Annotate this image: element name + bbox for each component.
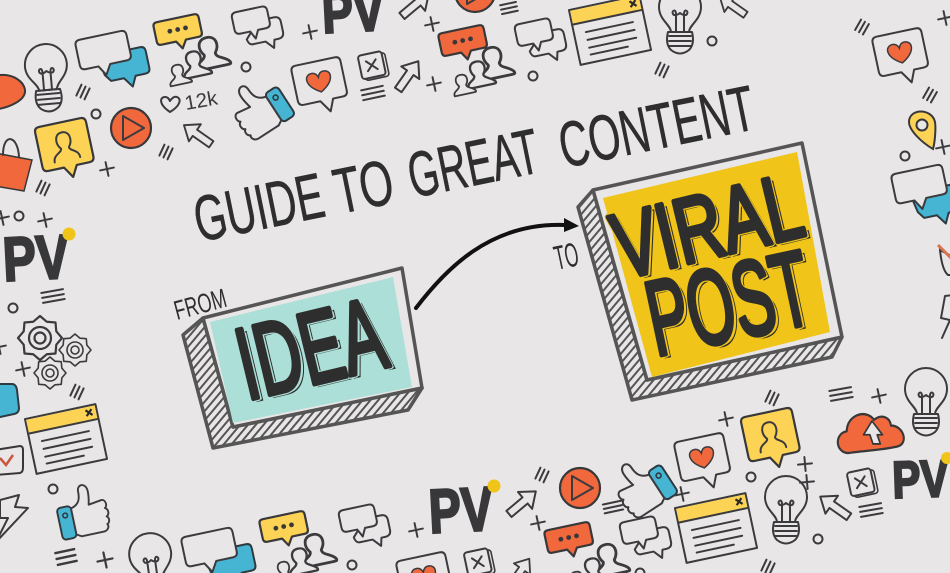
- ring: [348, 560, 356, 570]
- ring: [900, 152, 910, 160]
- plus: [426, 76, 442, 92]
- icon: map pin: [909, 112, 935, 149]
- lines: [765, 391, 779, 405]
- lines: [603, 501, 623, 513]
- lines: [41, 289, 65, 303]
- icon: play: [560, 468, 600, 508]
- icon: bulb: [23, 42, 71, 113]
- icon: orange cloud: [0, 75, 25, 110]
- icon: upload cloud: [838, 414, 904, 453]
- plus: [408, 522, 424, 538]
- lines: [923, 88, 937, 102]
- post label: [636, 228, 825, 382]
- icon: white bubble: [181, 527, 240, 573]
- plus: [37, 212, 53, 228]
- icon: thumb: [223, 70, 296, 143]
- lines: [655, 63, 669, 77]
- icon: blue bubble: [0, 384, 19, 420]
- icon: arrow: [814, 488, 855, 526]
- icon: people: [561, 541, 632, 573]
- icon: people: [162, 34, 233, 86]
- viral box depth: [578, 190, 842, 400]
- idea label: IDEA: [230, 279, 400, 424]
- icon: person bubble: [740, 407, 803, 473]
- icon: bulb: [765, 476, 807, 544]
- icon: thumb: [606, 448, 679, 521]
- icon: yellow chat: [259, 511, 310, 550]
- icon: gear: [59, 334, 91, 366]
- icon: person bubble: [34, 117, 97, 183]
- plus: [797, 456, 813, 472]
- panel: viral post: [578, 143, 842, 400]
- icon: people: [268, 531, 339, 573]
- lines: [76, 85, 90, 99]
- icon: blue bubble: [910, 183, 950, 230]
- icons: bottom cluster: [126, 368, 950, 573]
- icons: top centre cluster: [320, 0, 751, 100]
- plus: [871, 388, 887, 404]
- title: GREAT: [401, 115, 545, 212]
- icon: arrow: [395, 0, 436, 24]
- viral yellow fill: [603, 152, 830, 377]
- icon: heart bubble: [396, 551, 455, 573]
- idea label: [226, 275, 400, 425]
- icon: white bubble: [75, 30, 134, 80]
- icon: shopping bag: [0, 139, 32, 191]
- lines: [500, 2, 518, 14]
- plus: [674, 486, 690, 502]
- icon: orange chat: [544, 522, 595, 561]
- icons: left cluster: [0, 210, 114, 569]
- icons: right cluster: [855, 10, 950, 338]
- lines: [829, 387, 853, 401]
- icon: window: [25, 404, 107, 474]
- icon: lightning: [941, 295, 950, 338]
- lines: [535, 468, 549, 482]
- 12k counter: 12k: [183, 87, 220, 115]
- lines: [855, 20, 869, 34]
- icon: play: [111, 108, 151, 148]
- icon: large gear: [18, 316, 62, 360]
- plus: [0, 210, 10, 226]
- icon: blue bubble: [203, 543, 258, 573]
- icon: arrow: [714, 0, 751, 23]
- icons: top left cluster: [0, 3, 350, 195]
- icon: yellow chat: [153, 14, 204, 53]
- icon: bulb: [659, 0, 701, 54]
- viral label: [603, 154, 817, 302]
- lines: [859, 503, 883, 517]
- icon: white bubble: [891, 164, 950, 214]
- icon: window: [675, 493, 757, 563]
- plus: [99, 161, 115, 177]
- icon: bulb: [905, 368, 947, 436]
- icon: arrow: [502, 483, 543, 522]
- ring: [8, 304, 18, 312]
- icon: arrow: [503, 553, 537, 573]
- icon: play top: [455, 0, 495, 12]
- icon: window: [569, 0, 651, 65]
- viral label: VIRAL: [607, 157, 817, 301]
- lines: [361, 86, 385, 100]
- title: [187, 72, 761, 256]
- plus: [302, 24, 318, 40]
- ring: [746, 472, 756, 482]
- idea label: IDEA: [226, 276, 396, 421]
- lines: [55, 549, 77, 565]
- post label: POST: [636, 229, 821, 378]
- panel: idea: [183, 268, 422, 448]
- icon: heart bubble: [872, 27, 931, 89]
- idea teal fill: [210, 277, 412, 423]
- icon: close box: [358, 50, 389, 81]
- arrow: idea to viral post: [416, 218, 579, 308]
- ring: [528, 72, 538, 80]
- from label: FROM: [171, 283, 230, 326]
- plus: [96, 551, 114, 569]
- ring: [242, 62, 250, 72]
- plus: [799, 474, 815, 490]
- icon: heart bubble: [674, 432, 733, 494]
- icon: lightning: [0, 495, 28, 542]
- plus: [530, 515, 546, 531]
- icon: shopping bag: [938, 245, 950, 275]
- icon: two bubbles: [514, 15, 569, 67]
- icon: bulb: [126, 530, 177, 573]
- ring: [814, 534, 822, 544]
- idea box face: [203, 268, 422, 427]
- icon: arrow: [389, 55, 427, 96]
- lines: [761, 560, 775, 573]
- icon: close box: [847, 467, 878, 498]
- ring: [14, 212, 24, 220]
- icon: two bubbles: [338, 501, 393, 553]
- to label: TO: [551, 236, 582, 278]
- plus: [718, 411, 734, 427]
- idea label: IDEA: [226, 276, 396, 421]
- plus: [937, 10, 950, 26]
- viral label: VIRAL: [603, 155, 812, 298]
- icon: blue bubble: [97, 46, 152, 93]
- icon: check box: [0, 446, 23, 475]
- viral label: VIRAL: [603, 155, 812, 298]
- ring: [708, 36, 716, 46]
- ring: [48, 484, 58, 494]
- icon: close box: [464, 547, 495, 573]
- ring: [636, 568, 644, 573]
- lines: [36, 181, 50, 195]
- icon: gear: [34, 357, 66, 389]
- post label: POST: [640, 232, 825, 381]
- title: CONTENT: [552, 72, 761, 182]
- icon: heart bubble: [291, 56, 350, 118]
- icon: heart outline: [161, 97, 180, 112]
- plus: [424, 16, 440, 32]
- plus: [0, 339, 7, 355]
- icon: thumb: [53, 481, 112, 540]
- icon: two bubbles: [231, 3, 286, 55]
- idea box depth: [183, 318, 422, 448]
- icon: two bubbles: [619, 513, 674, 565]
- lines: [70, 385, 84, 399]
- title: TO: [327, 145, 400, 228]
- lines: [159, 145, 173, 159]
- post label: POST: [636, 229, 821, 378]
- logo: PV bottom: PV: [427, 475, 495, 547]
- title: GUIDE: [187, 159, 330, 256]
- viral box face: [593, 143, 842, 380]
- plus: [935, 139, 950, 155]
- icon: arrow: [178, 117, 217, 153]
- icon: orange chat: [438, 25, 489, 64]
- icon: people: [446, 44, 517, 96]
- logo: PV left: PV: [1, 223, 71, 295]
- plus: [15, 361, 31, 377]
- ring: [92, 110, 100, 118]
